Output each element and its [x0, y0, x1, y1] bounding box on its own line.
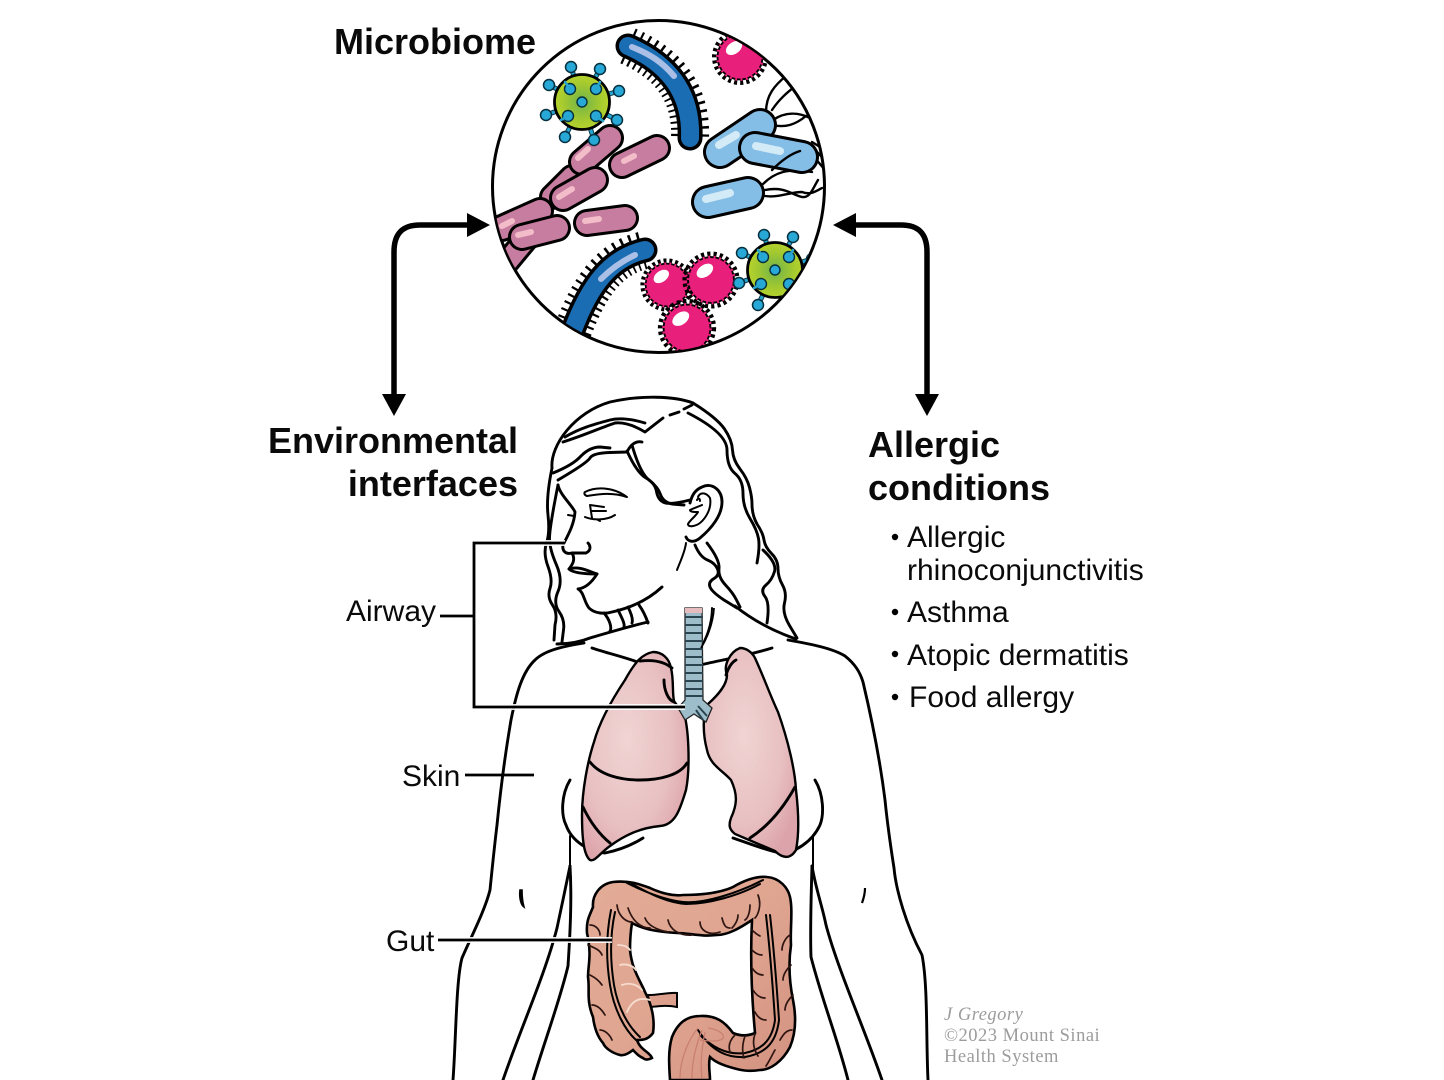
- green virus particles: [540, 62, 818, 314]
- title: Microbiome: Microbiome: [334, 21, 536, 62]
- lungs: [582, 648, 798, 860]
- credit: [944, 1005, 1100, 1067]
- heading: Environmental interfaces: interfaces: [348, 463, 518, 504]
- right lung: [704, 648, 798, 857]
- heading: Allergic conditions: Allergic: [868, 424, 1000, 465]
- label: Skin: [402, 760, 534, 793]
- colon outline: [587, 877, 795, 1080]
- list of allergic conditions: rhinoconjunctivitis: [907, 554, 1144, 587]
- face: [558, 485, 722, 645]
- list of allergic conditions: Food allergy: [909, 681, 1074, 714]
- credit: J Gregory: [944, 1005, 1024, 1025]
- trachea: [678, 608, 714, 722]
- credit: ©2023 Mount Sinai: [944, 1026, 1100, 1046]
- microbiome circle panel: [492, 20, 825, 353]
- label: Gut: Gut: [386, 925, 435, 958]
- dark blue rod bacteria with hairs: [573, 46, 690, 330]
- credit: Health System: [944, 1047, 1059, 1067]
- pink rod bacteria: [502, 138, 657, 262]
- arrow: microbiome to environmental interfaces: [382, 213, 490, 416]
- list of allergic conditions: Asthma: [907, 596, 1009, 629]
- heading: Allergic conditions: [868, 424, 1050, 508]
- label: Airway: [346, 543, 685, 707]
- taeniae: [607, 910, 640, 1040]
- flagella: [763, 76, 825, 197]
- arrow: microbiome to allergic conditions: [833, 213, 939, 416]
- heading: Allergic conditions: conditions: [868, 467, 1050, 508]
- rectum: [680, 1028, 724, 1078]
- heading: Environmental interfaces: [268, 420, 518, 504]
- label: Airway: Airway: [346, 595, 436, 628]
- pink spiky cocci: [644, 32, 764, 353]
- colon: [587, 877, 795, 1080]
- figure: woman's body outline: [453, 397, 928, 1080]
- light blue rod bacteria: [706, 125, 802, 202]
- haustra folds: [588, 895, 793, 1066]
- label: Skin: Skin: [402, 760, 460, 793]
- list of allergic conditions: Atopic dermatitis: [907, 639, 1129, 672]
- list of allergic conditions: [892, 521, 1144, 714]
- left lung: [582, 652, 689, 860]
- heading: Environmental interfaces: Environmental: [268, 420, 518, 461]
- hair: [545, 397, 797, 642]
- list of allergic conditions: Allergic: [907, 521, 1005, 554]
- neck rings and shoulders: [453, 605, 928, 1080]
- small intestine stub: [648, 993, 677, 1007]
